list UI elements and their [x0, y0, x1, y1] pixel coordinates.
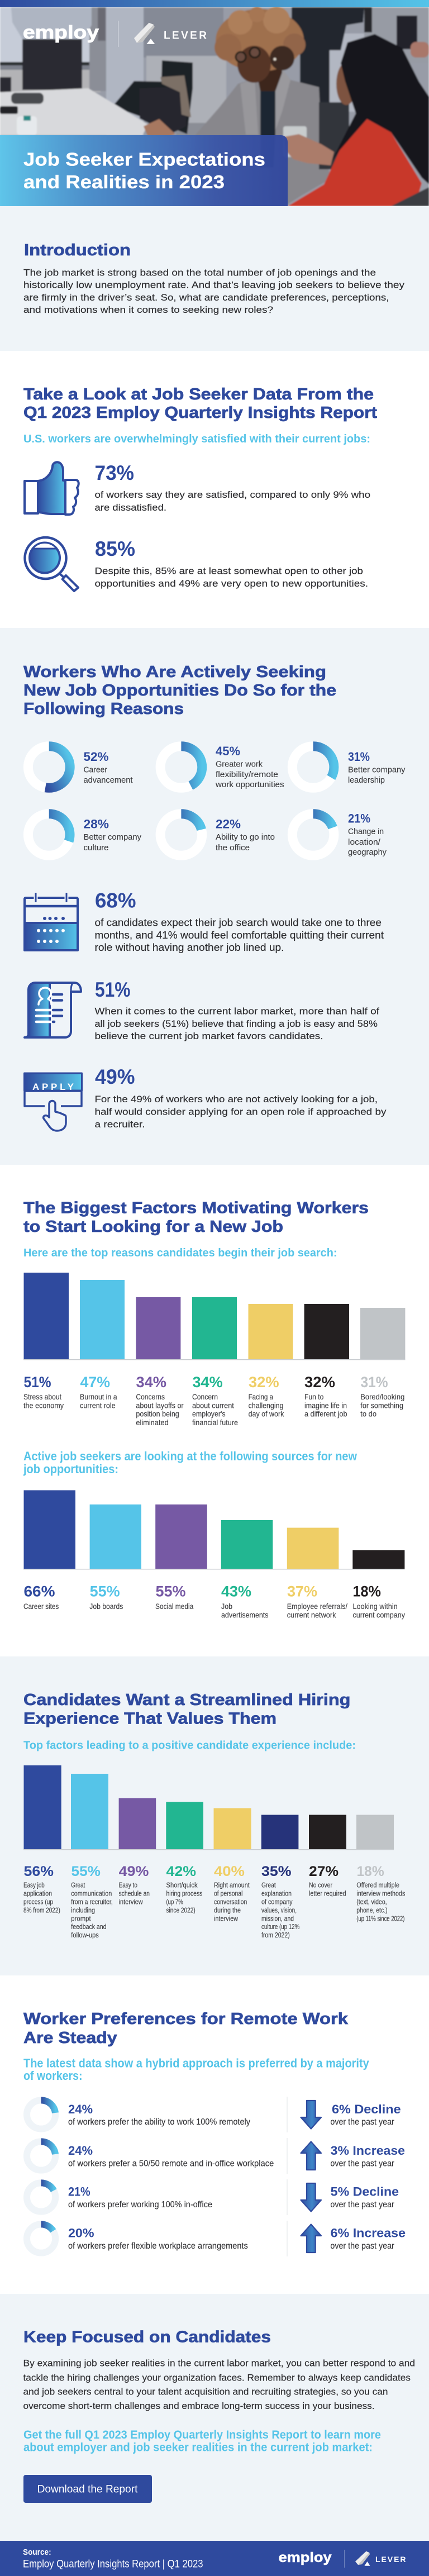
stat: 85%: Despite this, 85% are at least somewhat open to other job [95, 566, 363, 577]
subheading: hybrid approach [23, 2056, 369, 2083]
factor: short hiring process [166, 1864, 202, 1914]
row: flexible arrangements: over the past year [330, 2241, 394, 2251]
title: Job Seeker Expectations [23, 149, 265, 170]
row: flexible arrangements: 20% [68, 2226, 94, 2240]
closing text: and job seekers central to your talent acquisition and recruiting strategies, so you can [23, 2387, 388, 2397]
factor: no cover letter: 27% [309, 1864, 339, 1879]
stat: 51%: believe the current job market favors candidates. [95, 1031, 323, 1041]
reason: fun to imagine: 32% [304, 1374, 335, 1391]
source text [23, 2548, 203, 2570]
subheading: sources [23, 1449, 358, 1476]
source: career sites [23, 1583, 59, 1611]
hero photo: two women at a meeting table [0, 7, 429, 206]
row: 100% remote: over the past year [330, 2117, 394, 2127]
reason: challenging day [249, 1374, 284, 1418]
reason: employer financial future: financial future [192, 1418, 238, 1427]
factor: easy to schedule [119, 1864, 150, 1906]
source: career sites: 66% [23, 1583, 55, 1600]
call to action text [23, 2429, 381, 2454]
factor: multiple interview methods: (up 11% since 2022) [356, 1914, 404, 1922]
heading: job seeker data: Take a Look at Job Seeker Data From the [23, 385, 374, 403]
panel: reasons for seeking [0, 628, 429, 1165]
stat: 51% [95, 978, 379, 1041]
factor: easy to schedule: schedule an [119, 1889, 150, 1897]
stat: 49%: a recruiter. [95, 1119, 145, 1130]
donut: 21% location [292, 811, 387, 857]
factor: great communication: 55% [72, 1864, 101, 1879]
heading: job seeker data [23, 385, 377, 422]
source: social media: 55% [155, 1583, 185, 1600]
row: 50/50 hybrid: 3% Increase [331, 2144, 405, 2158]
icon: thumbs up [25, 462, 79, 515]
call to action text: about employer and job seeker realities in the current job market: [23, 2441, 373, 2454]
source: looking within: Looking within [353, 1602, 398, 1611]
stat: 68%: of candidates expect their job search would take one to three [95, 917, 382, 928]
row: 100% in-office: 5% Decline [331, 2185, 399, 2199]
heading: hiring experience: Candidates Want a Streamlined Hiring [23, 1691, 350, 1709]
call to action text: Get the full Q1 2023 Employ Quarterly Insights Report to learn more [23, 2429, 381, 2441]
reason: bored [360, 1374, 404, 1418]
reason: employer financial future: Concern [192, 1392, 218, 1401]
heading: biggest factors [23, 1199, 369, 1236]
factor: company values: explanation [261, 1889, 292, 1897]
row: 50/50 hybrid: of workers prefer a 50/50 remote and in-office workplace [68, 2159, 274, 2169]
icon: calendar [25, 893, 78, 950]
title: and Realities in 2023 [23, 172, 225, 192]
factor: great communication: including [71, 1906, 95, 1914]
reason: fun to imagine: a different job [304, 1410, 347, 1418]
heading: keep focused: Keep Focused on Candidates [23, 2329, 271, 2346]
row: 50/50 hybrid: over the past year [330, 2159, 394, 2169]
bar chart: candidate experience [23, 1765, 394, 1850]
source: job boards: Job boards [89, 1602, 123, 1611]
reason: employer financial future: 34% [192, 1374, 223, 1391]
factor: personal conversation: of personal [214, 1889, 242, 1897]
donut: 45% flexibility: flexibility/remote [216, 770, 278, 779]
factor: company values: values, vision, [261, 1906, 297, 1914]
factor: company values: Great [261, 1881, 276, 1889]
factor: easy application: 56% [23, 1864, 54, 1879]
bar chart: sources [23, 1491, 404, 1570]
factor: short hiring process: 42% [166, 1864, 196, 1879]
factor: great communication: follow-ups [71, 1931, 99, 1939]
source: career sites: Career sites [23, 1602, 59, 1611]
closing text [23, 2358, 415, 2411]
logo: employ and Lever, footer: employ [279, 2550, 332, 2565]
panel: keep focused [0, 2294, 429, 2541]
source: job advertisements: Job [221, 1602, 232, 1611]
reason: layoffs: Concerns [136, 1392, 165, 1401]
donut: 31% leadership: Better company [348, 765, 406, 774]
reason: fun to imagine: imagine life in [304, 1401, 347, 1410]
subheading: hybrid approach: of workers: [23, 2069, 83, 2083]
icon: apply button and hand [25, 1073, 82, 1131]
donut: 31% leadership: leadership [348, 775, 385, 785]
heading: biggest factors: The Biggest Factors Motivating Workers [23, 1199, 369, 1217]
reason: layoffs: position being [136, 1410, 179, 1418]
donut: 22% office: 22% [216, 817, 241, 831]
donut: 21% location: 21% [348, 811, 370, 826]
source: job advertisements: advertisements [221, 1610, 268, 1619]
logo: employ and Lever: LEVER [164, 30, 207, 41]
intro text: are firmly in the driver’s seat. So, what are candidate preferences, perceptions, [23, 292, 389, 303]
factor: multiple interview methods: Offered multiple [356, 1881, 399, 1889]
donut: 31% leadership: 31% [348, 750, 370, 764]
reason: employer financial future: about current [192, 1401, 234, 1410]
button: download the report: Download the Report [37, 2484, 138, 2496]
stat: 68%: months, and 41% would feel comfortable quitting their current [95, 930, 384, 941]
stat: 68%: role without having another job lined up. [95, 942, 284, 953]
heading: reasons: Following Reasons [23, 700, 184, 718]
factor: easy application: Easy job [23, 1881, 45, 1889]
reason: challenging day: challenging [249, 1401, 283, 1410]
factor: easy application: process (up [23, 1897, 53, 1906]
donut: 45% flexibility [160, 744, 284, 789]
logo: employ and Lever: employ [23, 22, 99, 42]
reason: challenging day: 32% [249, 1374, 279, 1391]
stat: 49%: half would consider applying for an open role if approached by [95, 1106, 387, 1117]
donut: 28% culture: Better company [84, 832, 141, 842]
factor: easy to schedule: interview [119, 1897, 143, 1906]
factor: multiple interview methods: 18% [356, 1864, 384, 1879]
footer [0, 2541, 429, 2576]
factor: personal conversation: during the [214, 1906, 241, 1914]
factor: no cover letter: letter required [309, 1889, 346, 1897]
factor: great communication: from a recruiter, [71, 1897, 113, 1906]
source: job advertisements [221, 1583, 268, 1619]
stat: 73%: are dissatisfied. [95, 502, 166, 513]
title [23, 149, 265, 192]
reason: layoffs: eliminated [136, 1418, 169, 1427]
reason: bored: for something [360, 1401, 403, 1410]
factor: personal conversation [214, 1864, 250, 1922]
reason: layoffs: about layoffs or [136, 1401, 184, 1410]
reason: burnout [80, 1374, 117, 1410]
subheading: satisfied: U.S. workers are overwhelmingly satisfied with their current jobs: [23, 433, 370, 445]
row: 100% remote: 24% [68, 2102, 93, 2116]
row: 100% in-office [27, 2179, 399, 2215]
source: looking within: 18% [353, 1583, 381, 1600]
subheading: top reasons: Here are the top reasons candidates begin their job search: [23, 1247, 337, 1259]
donut: 22% office: Ability to go into [216, 832, 275, 842]
reason: burnout: current role [80, 1401, 116, 1410]
factor: no cover letter [309, 1864, 346, 1897]
heading: remote work: Are Steady [23, 2029, 117, 2047]
reason: challenging day: Facing a [249, 1392, 273, 1401]
row: 100% in-office: over the past year [330, 2200, 394, 2210]
stat: 85%: 85% [95, 537, 135, 560]
donut: 22% office: the office [216, 843, 250, 853]
row: 100% remote [27, 2097, 401, 2132]
source: employee referrals: Employee referrals/ [287, 1602, 347, 1611]
panel: biggest factors [0, 1165, 429, 1656]
intro text: and motivations when it comes to seeking new roles? [23, 304, 273, 315]
top gradient bar [0, 0, 429, 7]
source text: Source: [23, 2548, 51, 2557]
factor: easy application [23, 1864, 60, 1914]
icon: magnifying glass [25, 537, 78, 591]
factor: short hiring process: (up 7% [166, 1897, 183, 1906]
source: job boards: 55% [90, 1583, 120, 1600]
factor: short hiring process: since 2022) [166, 1906, 196, 1914]
panel: introduction [0, 206, 429, 351]
subheading: hybrid approach: The latest data show a hybrid approach is preferred by a majority [23, 2056, 369, 2070]
factor: multiple interview methods: interview methods [356, 1889, 405, 1897]
factor: easy application: application [23, 1889, 52, 1897]
factor: great communication: Great [71, 1881, 85, 1889]
reason: layoffs: 34% [136, 1374, 166, 1391]
donut: 52% career advancement: 52% [84, 750, 108, 764]
row: flexible arrangements [27, 2221, 406, 2256]
reason: employer financial future [192, 1374, 238, 1427]
reason: bored: Bored/looking [360, 1392, 404, 1401]
subheading: top factors: Top factors leading to a positive candidate experience include: [23, 1740, 356, 1752]
donut: 21% location: location/ [348, 837, 381, 847]
factor: easy to schedule: 49% [119, 1864, 149, 1879]
reason: stress about the economy: 51% [23, 1374, 51, 1391]
heading: job seeker data: Q1 2023 Employ Quarterly Insights Report [23, 404, 377, 422]
stat: 51%: 51% [95, 978, 131, 1001]
reason: fun to imagine: Fun to [304, 1392, 324, 1401]
factor: short hiring process: Short/quick [166, 1881, 198, 1889]
heading: hiring experience: Experience That Values Them [23, 1710, 277, 1727]
donut: 52% career advancement [28, 746, 133, 788]
row: 100% remote: 6% Decline [332, 2102, 401, 2116]
subheading: sources: job opportunities: [23, 1462, 118, 1476]
row: 100% remote: of workers prefer the ability to work 100% remotely [68, 2117, 250, 2127]
stat: 49%: For the 49% of workers who are not actively looking for a job, [95, 1094, 378, 1104]
stat: 85%: opportunities and 49% are very open to new opportunities. [95, 578, 368, 589]
stat: 73%: 73% [95, 461, 134, 484]
donut: 21% location: geography [348, 847, 387, 857]
closing text: By examining job seeker realities in the current labor market, you can better respond to and [23, 2358, 415, 2369]
stat: 73% [95, 461, 370, 513]
row: 100% in-office: of workers prefer working 100% in-office [68, 2200, 212, 2210]
source: social media [155, 1583, 193, 1611]
factor: company values: culture (up 12% [261, 1922, 299, 1931]
factor: company values: from 2022) [261, 1931, 290, 1939]
stat: 49%: 49% [95, 1065, 135, 1088]
factor: personal conversation: 40% [214, 1864, 245, 1879]
panel: hiring experience [0, 1656, 429, 1975]
factor: great communication: feedback and [71, 1922, 106, 1931]
donut: 45% flexibility: Greater work [216, 760, 263, 769]
heading: introduction: Introduction [24, 241, 131, 259]
factor: company values: mission, and [261, 1914, 294, 1922]
row: 100% in-office: 21% [68, 2185, 90, 2199]
stat: 51%: When it comes to the current labor market, more than half of [95, 1006, 379, 1017]
factor: personal conversation: conversation [214, 1897, 247, 1906]
factor: personal conversation: Right amount [214, 1881, 250, 1889]
factor: no cover letter: No cover [309, 1881, 333, 1889]
factor: multiple interview methods: phone, etc.) [356, 1906, 388, 1914]
heading: reasons: New Job Opportunities Do So for the [23, 682, 336, 699]
donut: 21% location: Change in [348, 827, 384, 836]
source: looking within [353, 1583, 405, 1619]
row: 50/50 hybrid: 24% [68, 2144, 93, 2158]
factor: easy application: 8% from 2022) [23, 1906, 60, 1914]
donut: 28% culture [28, 814, 141, 855]
reason: fun to imagine [304, 1374, 347, 1418]
factor: great communication: communication [71, 1889, 112, 1897]
factor: multiple interview methods: (text, video, [356, 1897, 387, 1906]
reason: stress about the economy: the economy [23, 1401, 64, 1410]
source: job boards [89, 1583, 123, 1611]
reason: stress about the economy [23, 1374, 64, 1410]
factor: company values: 35% [261, 1864, 292, 1879]
source: employee referrals: 37% [287, 1583, 317, 1600]
factor: multiple interview methods [356, 1864, 405, 1922]
bar chart: reasons [23, 1273, 406, 1360]
donut: 52% career advancement: advancement [84, 775, 133, 785]
heading: biggest factors: to Start Looking for a New Job [23, 1218, 283, 1236]
icon: resume scroll [25, 983, 81, 1037]
heading: reasons: Workers Who Are Actively Seeking [23, 663, 326, 681]
row: flexible arrangements: 6% Increase [331, 2226, 406, 2240]
intro text: historically low unemployment rate. And that’s leaving job seekers to believe they [23, 280, 405, 291]
reason: challenging day: day of work [249, 1410, 284, 1418]
panel: remote work preferences [0, 1975, 429, 2294]
factor: easy to schedule: Easy to [119, 1881, 137, 1889]
stat: 51%: all job seekers (51%) believe that finding a job is easy and 58% [95, 1018, 378, 1029]
closing text: overcome short-term challenges and embrace long-term success in your business. [23, 2401, 374, 2411]
donut: 45% flexibility: work opportunities [215, 780, 284, 789]
reason: burnout: Burnout in a [80, 1392, 117, 1401]
source: looking within: current company [353, 1610, 405, 1619]
logo: employ and Lever, footer [279, 2550, 406, 2568]
donut: 28% culture: 28% [84, 817, 109, 831]
source: job advertisements: 43% [221, 1583, 251, 1600]
reason: layoffs [136, 1374, 184, 1427]
reason: stress about the economy: Stress about [23, 1392, 61, 1401]
source: employee referrals [287, 1583, 347, 1619]
heading: hiring experience [23, 1691, 350, 1727]
factor: company values [261, 1864, 299, 1939]
row: 50/50 hybrid [27, 2138, 405, 2174]
factor: company values: of company [261, 1897, 293, 1906]
source: employee referrals: current network [287, 1610, 336, 1619]
donut: 52% career advancement: Career [84, 765, 107, 774]
reason: bored: to do [360, 1410, 376, 1418]
donut: 31% leadership [292, 746, 406, 788]
heading: reasons [23, 663, 336, 718]
subheading: sources: Active job seekers are looking at the following sources for new [23, 1449, 358, 1463]
heading: remote work: Worker Preferences for Remote Work [23, 2010, 349, 2028]
stat: 49% [95, 1065, 387, 1130]
heading: remote work [23, 2010, 349, 2047]
row: flexible arrangements: of workers prefer flexible workplace arrangements [68, 2241, 248, 2251]
factor: great communication: prompt [71, 1914, 91, 1922]
logo: employ and Lever [23, 21, 207, 47]
stat: 73%: of workers say they are satisfied, compared to only 9% who [95, 489, 370, 500]
factor: personal conversation: interview [214, 1914, 239, 1922]
source: social media: Social media [155, 1602, 193, 1611]
logo: employ and Lever, footer: LEVER [375, 2555, 406, 2564]
factor: short hiring process: hiring process [166, 1889, 202, 1897]
donut: 45% flexibility: 45% [216, 744, 240, 758]
button: download the report [23, 2475, 152, 2503]
intro text: The job market is strong based on the total number of job openings and the [23, 267, 376, 278]
reason: burnout: 47% [80, 1374, 110, 1391]
stat: 68% [95, 889, 384, 953]
stat: 85% [95, 537, 368, 589]
panel: job seeker data [0, 351, 429, 628]
source text: Employ Quarterly Insights Report | Q1 2023 [23, 2559, 203, 2570]
icon: apply button and hand: APPLY [32, 1082, 74, 1092]
factor: great communication [71, 1864, 113, 1939]
closing text: tackle the hiring challenges your organization faces. Remember to always keep candidates [23, 2372, 411, 2383]
reason: bored: 31% [361, 1374, 388, 1391]
title panel [0, 135, 288, 206]
stat: 68%: 68% [95, 889, 136, 912]
donut: 22% office [160, 814, 275, 855]
donut: 28% culture: culture [84, 843, 108, 853]
intro text [23, 267, 405, 315]
reason: employer financial future: employer's [192, 1410, 226, 1418]
